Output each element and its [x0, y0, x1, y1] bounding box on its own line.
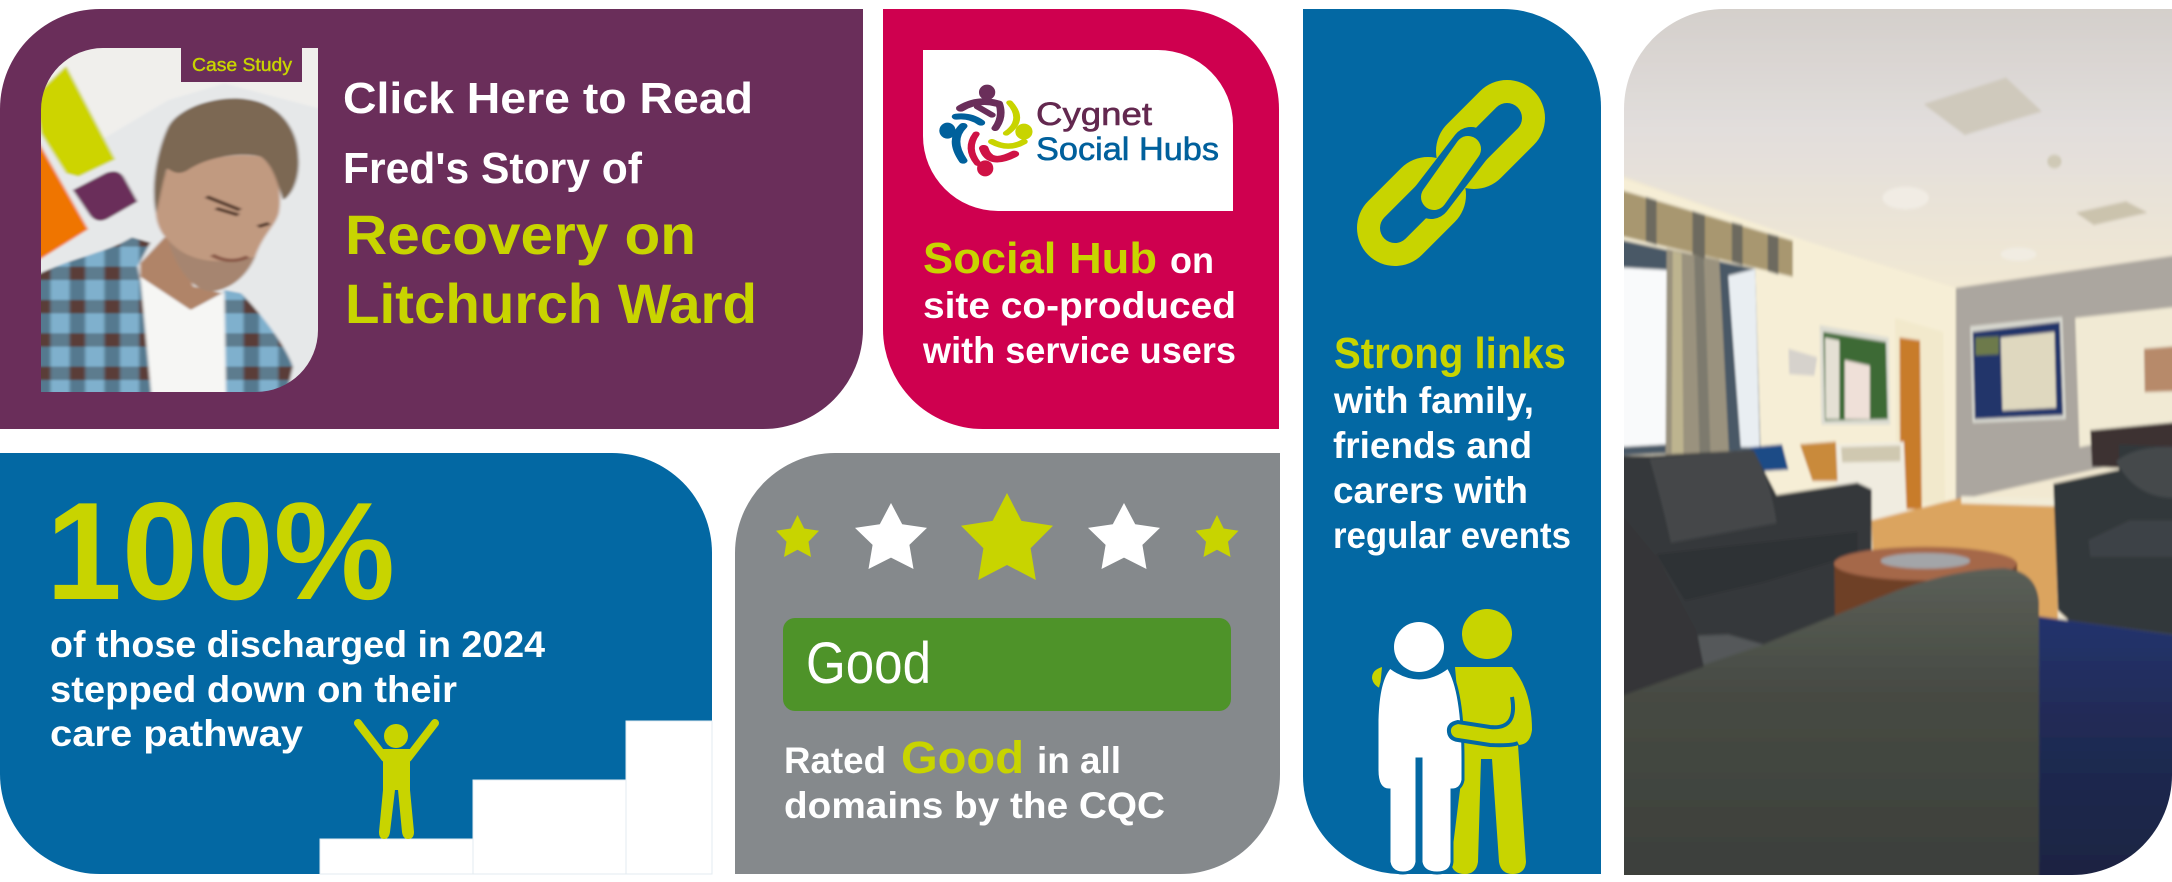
text: rated good: in all [1037, 740, 1121, 781]
icon: person with raised arms [358, 723, 435, 839]
text: strong links with family: regular events [1333, 515, 1571, 556]
text: social hub on site: with service users [922, 330, 1236, 371]
heading: click here [343, 74, 757, 335]
panel background [0, 453, 712, 874]
case study tab [181, 48, 302, 82]
text: social hub on site: on [1170, 240, 1214, 281]
text: rated good: Rated [784, 740, 886, 781]
stairs [320, 721, 712, 874]
text: social hub on site: Social Hub [923, 234, 1157, 283]
panel: 100 percent stepped down [0, 453, 712, 874]
panel: Fred's case study [0, 9, 863, 429]
text: strong links with family: with family, [1333, 380, 1534, 421]
logo card [923, 50, 1233, 211]
panel: strong links [1303, 9, 1601, 874]
heading: click here: Click Here to Read [343, 74, 753, 123]
rating badge [783, 618, 1231, 711]
heading: click here: Fred's Story of [343, 144, 642, 193]
icon: chain link [1395, 118, 1507, 228]
heading: click here: Recovery on [345, 203, 696, 266]
text: discharged [50, 624, 545, 754]
text: strong links with family: Strong links [1334, 329, 1566, 378]
text: strong links with family [1333, 329, 1571, 556]
icon: two people embracing [1372, 609, 1532, 874]
rating badge: Good [806, 631, 931, 696]
case study tab: Case Study [192, 55, 292, 75]
heading: click here: Litchurch Ward [345, 272, 757, 335]
panel background [0, 9, 863, 429]
text: discharged: stepped down on their [50, 669, 457, 710]
text: strong links with family: carers with [1333, 470, 1528, 511]
five stars [776, 493, 1238, 580]
text: rated good: domains by the CQC [784, 785, 1165, 826]
panel: Social Hub [883, 9, 1279, 429]
text: discharged: care pathway [50, 713, 303, 754]
panel: CQC rating [735, 453, 1280, 874]
logo wordmark: Cygnet [1036, 96, 1152, 132]
panel background [735, 453, 1280, 874]
photo: ward lounge [1617, 0, 2172, 882]
logo wordmark [1036, 96, 1219, 167]
photo: man in plaid shirt [34, 43, 325, 397]
text: strong links with family: friends and [1333, 425, 1532, 466]
panel background [883, 9, 1279, 429]
logo wordmark: Social Hubs [1036, 131, 1219, 167]
text: social hub on site: site co-produced [923, 285, 1236, 326]
panel background [1303, 9, 1601, 874]
logo icon: four people in a circle [939, 85, 1033, 176]
big number: 100% [46, 474, 395, 629]
text: rated good [784, 732, 1165, 826]
text: rated good: Good [901, 732, 1024, 783]
text: social hub on site [922, 234, 1236, 371]
text: discharged: of those discharged in 2024 [50, 624, 545, 665]
